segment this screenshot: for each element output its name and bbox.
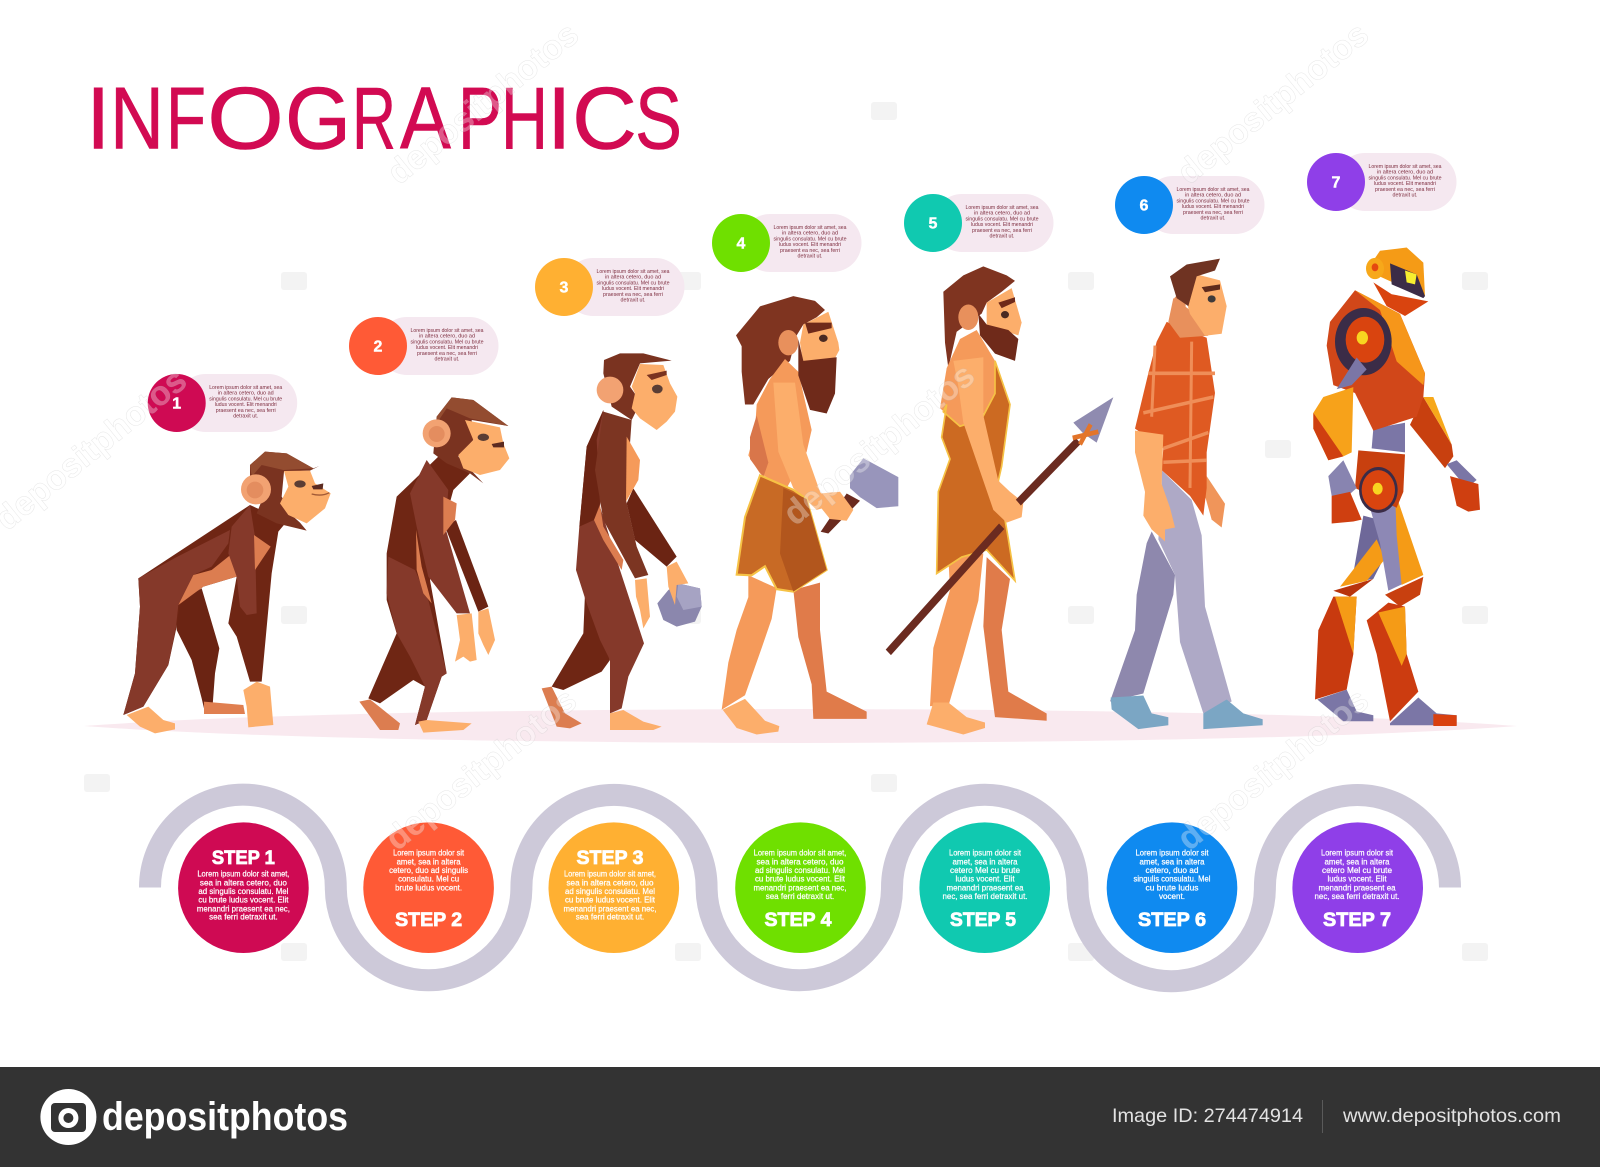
step 1: STEP 1 xyxy=(212,847,275,869)
step 2: Lorem ipsum dolor sit xyxy=(393,848,465,858)
step 4: cu brute ludus vocent. Elit xyxy=(755,874,846,884)
step 6: amet, sea in altera xyxy=(1140,856,1205,866)
step 7: Lorem ipsum dolor sit xyxy=(1321,848,1394,858)
callout 6 xyxy=(1115,176,1264,234)
step 3: ad singulis consulatu. Mel xyxy=(565,886,655,896)
step 2: amet, sea in altera xyxy=(397,856,461,866)
step 3: Lorem ipsum dolor sit amet, xyxy=(564,869,656,879)
callout 5: in altera cetero, duo ad xyxy=(974,211,1030,217)
figure 7: robot xyxy=(1313,248,1480,726)
image id: Image ID: 274474914 xyxy=(1112,1105,1303,1127)
callout 2: ludus vocent. Elit menandri xyxy=(416,345,478,351)
figure 4: caveman with stone hammer xyxy=(722,296,898,735)
figure 5: hunter with spear xyxy=(888,266,1113,735)
step 5: nec, sea ferri detraxit ut. xyxy=(942,891,1028,901)
step 2: consulatu. Mel cu xyxy=(398,874,459,884)
step 4: sea ferri detraxit ut. xyxy=(766,891,834,901)
step 1: cu brute ludus vocent. Elit xyxy=(198,895,289,905)
step 7: amet, sea in altera xyxy=(1324,856,1390,866)
callout 1: ludus vocent. Elit menandri xyxy=(215,402,277,408)
step 5: STEP 5 xyxy=(950,909,1016,931)
callout 5: detraxit ut. xyxy=(990,234,1015,240)
step 3: sea in altera cetero, duo xyxy=(566,877,654,887)
callout 6: Lorem ipsum dolor sit amet, sea xyxy=(1176,187,1250,193)
title: H xyxy=(501,68,548,167)
callout 2: in altera cetero, duo ad xyxy=(419,334,475,340)
step 2 xyxy=(363,822,494,953)
step 5: Lorem ipsum dolor sit xyxy=(949,848,1022,858)
callout 7: 7 xyxy=(1332,174,1341,192)
step 2: brute ludus vocent. xyxy=(395,882,462,892)
step 3: cu brute ludus vocent. Elit xyxy=(565,895,656,905)
callout 3: 3 xyxy=(560,280,569,296)
step 1: sea in altera cetero, duo xyxy=(200,877,287,887)
callout 4: in altera cetero, duo ad xyxy=(782,231,838,237)
callout 5: 5 xyxy=(929,216,938,232)
step 1 xyxy=(178,822,309,953)
callout 1: in altera cetero, duo ad xyxy=(218,391,274,397)
site url: www.depositphotos.com xyxy=(1342,1105,1561,1127)
callout 6: praesent ea nec, sea ferri xyxy=(1183,210,1243,216)
title: C xyxy=(572,68,637,167)
callout 7: praesent ea nec, sea ferri xyxy=(1375,187,1435,193)
step 3: sea ferri detraxit ut. xyxy=(576,912,644,922)
callout 4: ludus vocent. Elit menandri xyxy=(779,242,841,248)
callout 3: singulis consulatu. Mel cu brute xyxy=(596,280,670,286)
title: N xyxy=(110,68,164,167)
callout 5 xyxy=(904,194,1054,252)
title: F xyxy=(166,68,206,167)
figure 3: upright ape with stone xyxy=(542,353,702,730)
step 4: sea in altera cetero, duo xyxy=(756,856,844,866)
step 7: ludus vocent. Elit xyxy=(1328,874,1387,884)
callout 4: singulis consulatu. Mel cu brute xyxy=(774,236,846,242)
step 4 xyxy=(735,822,866,953)
step 6: Lorem ipsum dolor sit xyxy=(1136,848,1209,858)
step 6: STEP 6 xyxy=(1138,909,1206,931)
callout 3 xyxy=(535,258,684,316)
callout 3: Lorem ipsum dolor sit amet, sea xyxy=(596,269,670,275)
step 3: STEP 3 xyxy=(576,847,644,869)
callout 6: singulis consulatu. Mel cu brute xyxy=(1176,198,1250,204)
callout 4: Lorem ipsum dolor sit amet, sea xyxy=(774,225,847,231)
callout 3: in altera cetero, duo ad xyxy=(605,275,661,281)
figure 6: modern man xyxy=(1110,259,1263,729)
callout 7: ludus vocent. Elit menandri xyxy=(1374,181,1436,187)
infographic canvas: depositphotos xyxy=(378,681,584,858)
callout 4: praesent ea nec, sea ferri xyxy=(780,248,840,254)
callout 1: 1 xyxy=(172,396,181,412)
title: I xyxy=(86,68,110,167)
step 1: menandri praesent ea nec, xyxy=(197,903,290,913)
step 2: cetero, duo ad singulis xyxy=(389,865,468,875)
figure 1: crouching chimp xyxy=(123,452,331,733)
infographic canvas: depositphotos xyxy=(380,15,586,192)
callout 5: Lorem ipsum dolor sit amet, sea xyxy=(966,205,1039,211)
step 6 xyxy=(1107,822,1237,953)
callout 4: 4 xyxy=(737,236,746,252)
callout 7: singulis consulatu. Mel cu brute xyxy=(1368,175,1442,181)
callout 3: detraxit ut. xyxy=(620,298,646,304)
figure 2: walking ape xyxy=(359,397,509,733)
title: G xyxy=(285,68,351,167)
step 7: cetero Mel cu brute xyxy=(1322,865,1392,875)
step 7: menandri praesent ea xyxy=(1318,882,1396,892)
infographic canvas: depositphotos xyxy=(776,356,982,533)
infographic canvas: depositphotos xyxy=(1170,15,1376,192)
callout 6: in altera cetero, duo ad xyxy=(1185,193,1241,199)
title: A xyxy=(400,68,451,167)
step 6: cu brute ludus xyxy=(1146,882,1198,892)
step 1: Lorem ipsum dolor sit amet, xyxy=(197,869,289,879)
step 5: menandri praesent ea xyxy=(946,882,1024,892)
callout 6: detraxit ut. xyxy=(1200,216,1226,222)
step 3: menandri praesent ea nec, xyxy=(564,903,656,913)
step 7 xyxy=(1292,822,1423,953)
title: I xyxy=(547,68,571,167)
step 5: amet, sea in altera xyxy=(952,856,1018,866)
callout 3: praesent ea nec, sea ferri xyxy=(603,292,663,298)
callout 3: ludus vocent. Elit menandri xyxy=(602,286,664,292)
step 6: singulis consulatu. Mel xyxy=(1134,874,1211,884)
callout 2: 2 xyxy=(374,338,383,356)
callout 4 xyxy=(712,214,862,272)
step 5: cetero Mel cu brute xyxy=(950,865,1020,875)
title: O xyxy=(207,68,284,167)
step 1: ad singulis consulatu. Mel xyxy=(198,886,289,896)
callout 5: ludus vocent. Elit menandri xyxy=(971,222,1033,228)
step 4: Lorem ipsum dolor sit amet, xyxy=(754,848,846,858)
footer logo icon xyxy=(40,1089,96,1145)
title: S xyxy=(635,68,682,167)
callout 2: praesent ea nec, sea ferri xyxy=(417,351,477,357)
callout 5: praesent ea nec, sea ferri xyxy=(972,228,1032,234)
callout 5: singulis consulatu. Mel cu brute xyxy=(966,216,1038,222)
callout 2: Lorem ipsum dolor sit amet, sea xyxy=(410,328,484,334)
step 4: menandri praesent ea nec, xyxy=(754,882,846,892)
step 7: nec, sea ferri detraxit ut. xyxy=(1314,891,1400,901)
step 4: ad singulis consulatu. Mel xyxy=(755,865,845,875)
footer logo wordmark: depositphotos xyxy=(102,1095,348,1139)
step 3 xyxy=(548,822,679,953)
callout 1: praesent ea nec, sea ferri xyxy=(216,408,276,414)
callout 7: Lorem ipsum dolor sit amet, sea xyxy=(1368,164,1442,170)
step 4: STEP 4 xyxy=(764,909,832,931)
step 7: STEP 7 xyxy=(1323,909,1391,931)
callout 4: detraxit ut. xyxy=(798,254,823,260)
callout 1: detraxit ut. xyxy=(233,414,259,420)
callout 1: Lorem ipsum dolor sit amet, sea xyxy=(209,385,283,391)
callout 6: 6 xyxy=(1140,198,1149,214)
ground shadow xyxy=(84,709,1517,743)
title: R xyxy=(352,68,396,167)
callout 1 xyxy=(148,374,297,432)
timeline track xyxy=(150,795,1450,981)
callout 2: singulis consulatu. Mel cu brute xyxy=(410,339,484,345)
step 1: sea ferri detraxit ut. xyxy=(209,912,278,922)
title: P xyxy=(458,68,502,167)
step 6: vocent. xyxy=(1159,891,1185,901)
callout 7: detraxit ut. xyxy=(1392,193,1418,199)
callout 7 xyxy=(1307,153,1456,211)
infographic canvas: depositphotos xyxy=(1170,681,1376,858)
callout 6: ludus vocent. Elit menandri xyxy=(1182,204,1244,210)
callout 1: singulis consulatu. Mel cu brute xyxy=(209,396,282,402)
callout 7: in altera cetero, duo ad xyxy=(1377,170,1433,176)
callout 2: detraxit ut. xyxy=(434,357,460,363)
step 5: ludus vocent. Elit xyxy=(956,874,1015,884)
step 6: cetero, duo ad xyxy=(1146,865,1199,875)
footer bar xyxy=(0,1067,1600,1167)
step 2: STEP 2 xyxy=(395,909,462,931)
step 5 xyxy=(919,822,1050,953)
callout 2 xyxy=(349,317,498,375)
